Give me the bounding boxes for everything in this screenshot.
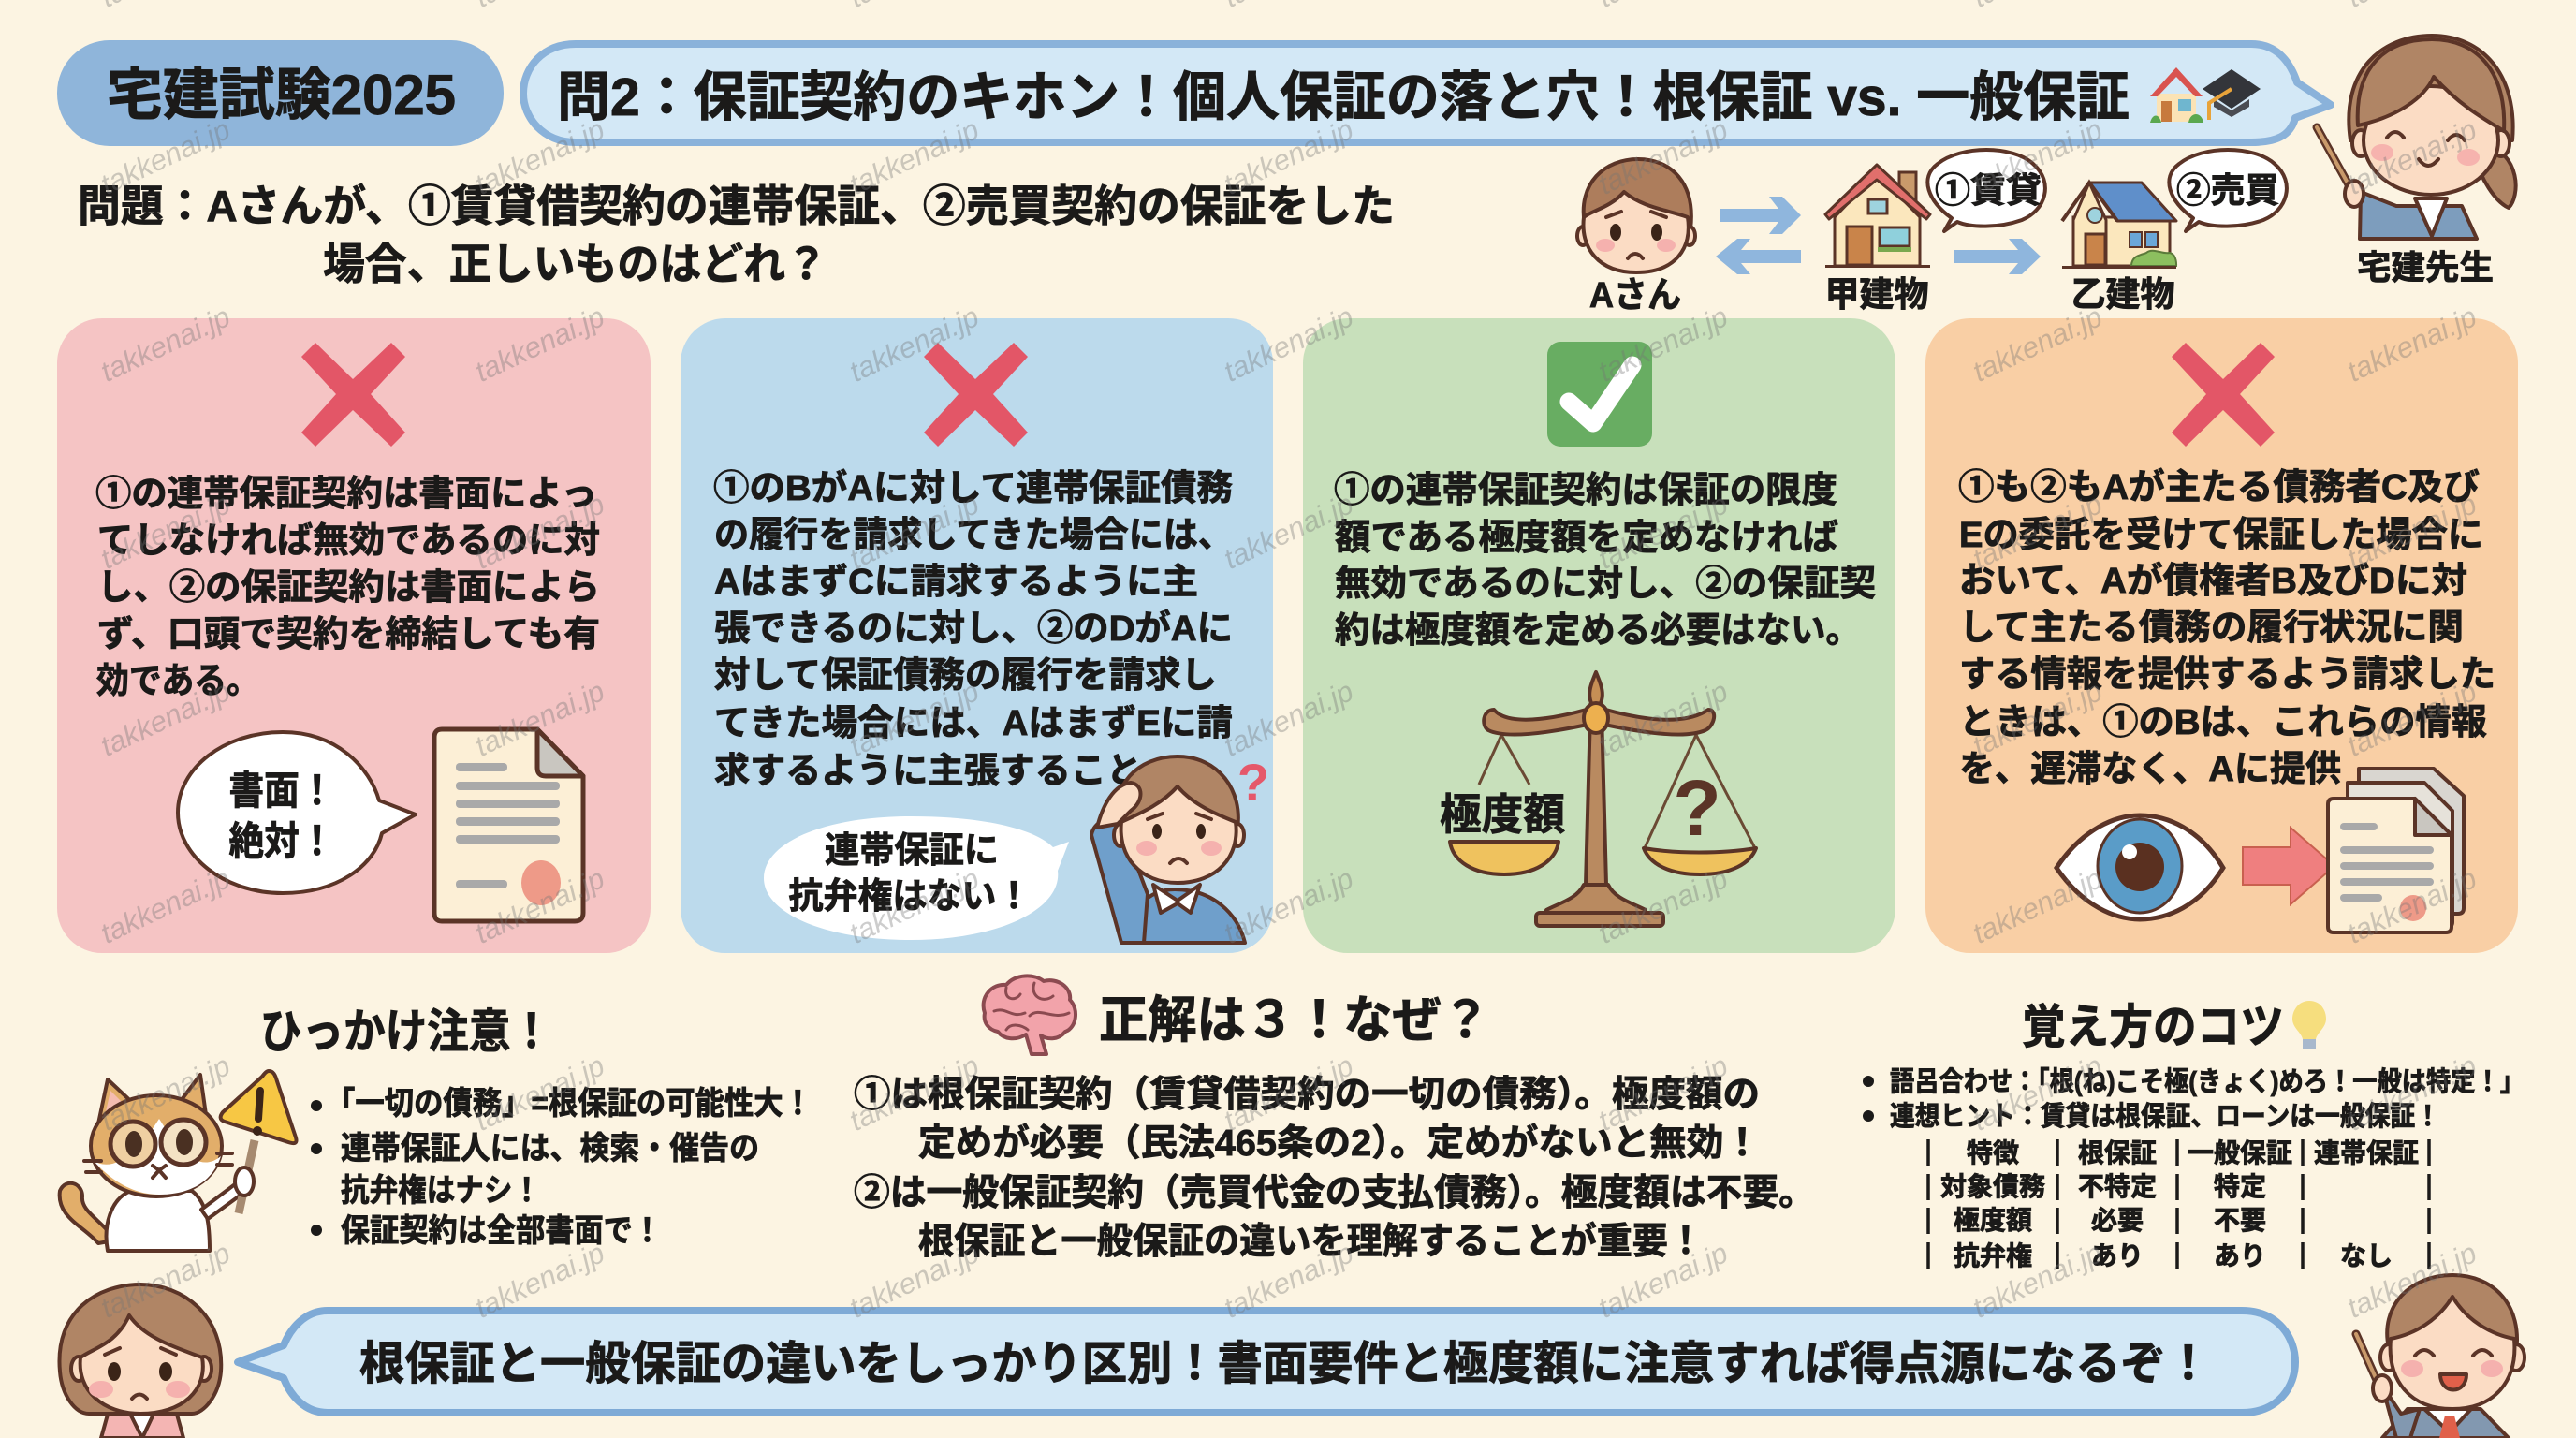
- choice 4 text: おいて、Aが債権者B及びDに対: [1959, 562, 2467, 601]
- watermarks: takkenai.jp: [1968, 300, 2107, 389]
- callout: 連帯保証に抗弁権はない！: 抗弁権はない！: [788, 877, 1032, 917]
- title speech banner: 問2：保証契約のキホン！個人保証の落と穴！根保証 vs. 一般保証: [557, 67, 2130, 127]
- choice 1 text: ず、口頭で契約を締結しても有: [97, 615, 600, 654]
- section: answer explanation: [854, 976, 1815, 1262]
- warning bullet list: 「一切の債務」=根保証の可能性大！: [326, 1086, 812, 1122]
- tips bullet list: 語呂合わせ：「根(ね)こそ極(きょく)めろ！一般は特定！」: [1890, 1066, 2525, 1097]
- comparison table: 不特定: [2078, 1172, 2157, 1201]
- comparison table: なし: [2340, 1241, 2393, 1270]
- icon: brain: [984, 976, 1076, 1054]
- watermarks: takkenai.jp: [2342, 861, 2481, 950]
- watermarks: takkenai.jp: [1968, 112, 2107, 201]
- icon: cross mark: [301, 343, 405, 447]
- watermarks: takkenai.jp: [844, 674, 984, 763]
- panel: choice 4: [1925, 318, 2518, 953]
- heading: 正解は３！なぜ？: 正解は３！なぜ？: [1099, 992, 1490, 1049]
- callout: 書面！絶対！: [178, 732, 416, 893]
- choice 2 text: ①のBがAに対して連帯保証債務: [713, 469, 1233, 508]
- arrow: eye to documents: [2243, 828, 2334, 904]
- arrow: building to building: [1954, 239, 2041, 274]
- question text: [78, 182, 1395, 288]
- watermarks: takkenai.jp: [1593, 1049, 1733, 1137]
- comparison table: 極度額: [1954, 1206, 2032, 1235]
- character: smiling man: [2356, 1275, 2525, 1438]
- callout: ②売買: ②売買: [2176, 171, 2279, 210]
- watermarks: takkenai.jp: [1219, 1236, 1358, 1325]
- panel: choice 2: [681, 318, 1273, 953]
- question text: 問題：Aさんが、①賃貸借契約の連帯保証、②売買契約の保証をした: [78, 182, 1395, 230]
- watermarks: takkenai.jp: [95, 300, 235, 389]
- choice 2 text: てきた場合には、AはまずEに請: [714, 704, 1233, 743]
- comparison table: あり: [2214, 1241, 2266, 1270]
- choice 1 text: 効である。: [96, 662, 259, 701]
- watermarks: takkenai.jp: [1219, 487, 1358, 576]
- watermarks: takkenai.jp: [470, 112, 609, 201]
- watermarks: takkenai.jp: [1219, 1049, 1358, 1137]
- watermarks: takkenai.jp: [1968, 487, 2107, 576]
- comparison table: 不要: [2214, 1206, 2266, 1235]
- icon: cross mark: [2172, 343, 2275, 447]
- panel: choice 1: [57, 318, 651, 953]
- warning bullet list: 保証契約は全部書面で！: [341, 1213, 662, 1249]
- character: worried woman: [59, 1284, 221, 1438]
- comparison table: 根保証: [2078, 1138, 2157, 1167]
- watermarks: takkenai.jp: [1593, 1236, 1733, 1325]
- choice 4 text: を、遅滞なく、Aに提供: [1959, 750, 2341, 789]
- watermarks: takkenai.jp: [844, 300, 984, 389]
- icon: balance scale: ?: [1673, 764, 1721, 852]
- choice 1 text: てしなければ無効であるのに対: [97, 521, 600, 561]
- explanation text: 定めが必要（民法465条の2）。定めがないと無効！: [918, 1123, 1761, 1164]
- comparison table: [1928, 1138, 2429, 1270]
- watermarks: takkenai.jp: [2342, 1236, 2481, 1325]
- callout: 連帯保証に抗弁権はない！: 連帯保証に: [825, 831, 999, 871]
- icon: eye: [2056, 815, 2223, 919]
- watermarks: takkenai.jp: [1968, 861, 2107, 950]
- section: trap warning: [60, 1005, 812, 1251]
- icon: house 乙: [2062, 183, 2176, 269]
- heading: 覚え方のコツ: 覚え方のコツ: [2022, 1001, 2284, 1053]
- comparison table: 一般保証: [2188, 1138, 2292, 1167]
- choice 4 text: [1958, 468, 2496, 789]
- diagram: A, buildings and contracts: [1577, 150, 2287, 315]
- icon: signed document: [434, 729, 583, 921]
- label: 甲建物: 甲建物: [1825, 275, 1928, 314]
- icon: small house: [2150, 67, 2203, 123]
- comparison table: あり: [2091, 1241, 2144, 1270]
- watermarks: takkenai.jp: [844, 1049, 984, 1137]
- watermarks: takkenai.jp: [95, 487, 235, 576]
- character: cat with warning sign: [60, 1071, 297, 1251]
- watermarks: takkenai.jp: [470, 861, 609, 950]
- watermarks: takkenai.jp: [2342, 487, 2481, 576]
- comparison table: 抗弁権: [1954, 1241, 2032, 1270]
- label: 乙建物: 乙建物: [2071, 275, 2175, 314]
- label: 宅建先生: 宅建先生: [2357, 248, 2494, 286]
- callout: ①賃貸: ①賃貸: [1935, 171, 2042, 210]
- character: Aさん: [1577, 159, 1695, 272]
- title speech banner: [523, 44, 2331, 142]
- choice 4 text: ときは、①のBは、これらの情報: [1959, 703, 2487, 742]
- warning bullet list: 連帯保証人には、検索・催告の: [341, 1131, 759, 1167]
- character: confused boy: [1091, 756, 1245, 943]
- watermarks: takkenai.jp: [1219, 112, 1358, 201]
- watermarks: takkenai.jp: [1593, 112, 1733, 201]
- tips bullet list: 連想ヒント：賃貸は根保証、ローンは一般保証！: [1890, 1101, 2440, 1132]
- arrow: A to building: [1720, 197, 1801, 234]
- comparison table: 特定: [2214, 1172, 2266, 1201]
- choice 1 text: ①の連帯保証契約は書面によっ: [95, 475, 597, 514]
- watermarks: takkenai.jp: [1593, 674, 1733, 763]
- watermarks: takkenai.jp: [470, 1049, 609, 1137]
- choice 2 text: 対して保証債務の履行を請求し: [714, 656, 1217, 696]
- explanation text: ②は一般保証契約（売買代金の支払債務）。極度額は不要。: [854, 1173, 1815, 1213]
- watermarks: takkenai.jp: [1968, 1236, 2107, 1325]
- warning bullet list: [311, 1086, 812, 1249]
- heading: ひっかけ注意！: ひっかけ注意！: [260, 1005, 552, 1058]
- choice 3 text: [1334, 471, 1876, 651]
- watermarks: takkenai.jp: [470, 300, 609, 389]
- watermarks: takkenai.jp: [1219, 300, 1358, 389]
- label: Aさん: Aさん: [1589, 276, 1681, 315]
- arrow: building to A: [1716, 239, 1801, 274]
- icon: balance scale: 極度額: [1440, 790, 1565, 839]
- choice 4 text: して主たる債務の履行状況に関: [1959, 609, 2464, 648]
- watermarks: takkenai.jp: [470, 487, 609, 576]
- icon: graduation cap: [2203, 69, 2261, 120]
- explanation text: ①は根保証契約（賃貸借契約の一切の債務）。極度額の: [854, 1075, 1760, 1115]
- explanation text: [854, 1075, 1815, 1262]
- choice 4 text: ①も②もAが主たる債務者C及び: [1958, 468, 2480, 507]
- watermarks: takkenai.jp: [1219, 674, 1358, 763]
- watermarks: takkenai.jp: [2342, 300, 2481, 389]
- choice 3 text: 額である極度額を定めなければ: [1335, 519, 1838, 558]
- choice 4 text: する情報を提供するよう請求した: [1959, 655, 2496, 695]
- callout: ①賃貸: [1927, 150, 2045, 231]
- icon: question mark: ?: [1237, 753, 1269, 812]
- choice 2 text: 張できるのに対し、②のDがAに: [714, 609, 1233, 649]
- icon: stack of documents: [2328, 769, 2464, 932]
- watermarks: takkenai.jp: [2342, 674, 2481, 763]
- choice 2 text: の履行を請求してきた場合には、: [714, 516, 1233, 555]
- choice 1 text: [95, 475, 600, 701]
- watermarks: takkenai.jp: [1593, 487, 1733, 576]
- choice 4 text: Eの委託を受けて保証した場合に: [1959, 516, 2483, 555]
- closing speech banner: [238, 1311, 2295, 1413]
- icon: light bulb: [2292, 1001, 2326, 1049]
- badge: exam year: [57, 40, 504, 146]
- watermarks: takkenai.jp: [1968, 1049, 2107, 1137]
- comparison table: 特徴: [1967, 1138, 2019, 1167]
- choice 2 text: [713, 469, 1233, 791]
- warning bullet list: 抗弁権はナシ！: [341, 1173, 541, 1209]
- callout: 連帯保証に抗弁権はない！: [764, 816, 1069, 940]
- choice 2 text: AはまずCに請求するように主: [714, 563, 1198, 602]
- choice 1 text: し、②の保証契約は書面によら: [97, 568, 600, 608]
- comparison table: 連帯保証: [2314, 1138, 2419, 1167]
- icon: balance scale: [1440, 672, 1756, 926]
- watermarks: takkenai.jp: [95, 1236, 235, 1325]
- character: teacher woman: [2317, 36, 2516, 239]
- question text: 場合、正しいものはどれ？: [323, 240, 827, 288]
- choice 3 text: 無効であるのに対し、②の保証契: [1335, 565, 1876, 604]
- closing speech banner: 根保証と一般保証の違いをしっかり区別！書面要件と極度額に注意すれば得点源になるぞ！: [359, 1339, 2211, 1389]
- watermarks: takkenai.jp: [1968, 674, 2107, 763]
- section: memory tips: [1863, 1001, 2525, 1270]
- watermarks: takkenai.jp: [95, 1049, 235, 1137]
- watermarks: takkenai.jp: [95, 674, 235, 763]
- icon: check mark: [1547, 342, 1652, 447]
- watermarks: takkenai.jp: [1593, 300, 1733, 389]
- icon: cross mark: [924, 343, 1028, 447]
- comparison table: 対象債務: [1940, 1172, 2045, 1201]
- watermarks: takkenai.jp: [95, 112, 235, 201]
- watermarks: takkenai.jp: [2342, 112, 2481, 201]
- callout: 書面！絶対！: 絶対！: [228, 819, 335, 863]
- explanation text: 根保証と一般保証の違いを理解することが重要！: [918, 1222, 1704, 1262]
- choice 2 text: 求するように主張すること: [714, 752, 1142, 791]
- watermarks: takkenai.jp: [844, 1236, 984, 1325]
- choice 3 text: ①の連帯保証契約は保証の限度: [1334, 471, 1837, 510]
- watermarks: takkenai.jp: [2342, 1049, 2481, 1137]
- comparison table: 必要: [2091, 1206, 2144, 1235]
- choice 3 text: 約は極度額を定める必要はない。: [1335, 611, 1861, 651]
- watermarks: takkenai.jp: [95, 861, 235, 950]
- tips bullet list: [1863, 1066, 2525, 1132]
- watermarks: takkenai.jp: [1593, 861, 1733, 950]
- watermarks: takkenai.jp: [470, 1236, 609, 1325]
- watermarks: takkenai.jp: [1219, 861, 1358, 950]
- watermarks: takkenai.jp: [470, 674, 609, 763]
- watermarks: takkenai.jp: [844, 487, 984, 576]
- badge: exam year: 宅建試験2025: [107, 64, 456, 126]
- watermarks: takkenai.jp: [844, 861, 984, 950]
- callout: 書面！絶対！: 書面！: [228, 769, 335, 813]
- callout: ②売買: [2169, 150, 2287, 231]
- panel: choice 3 (correct): [1303, 318, 1895, 953]
- icon: house 甲: [1825, 165, 1930, 268]
- watermarks: takkenai.jp: [844, 112, 984, 201]
